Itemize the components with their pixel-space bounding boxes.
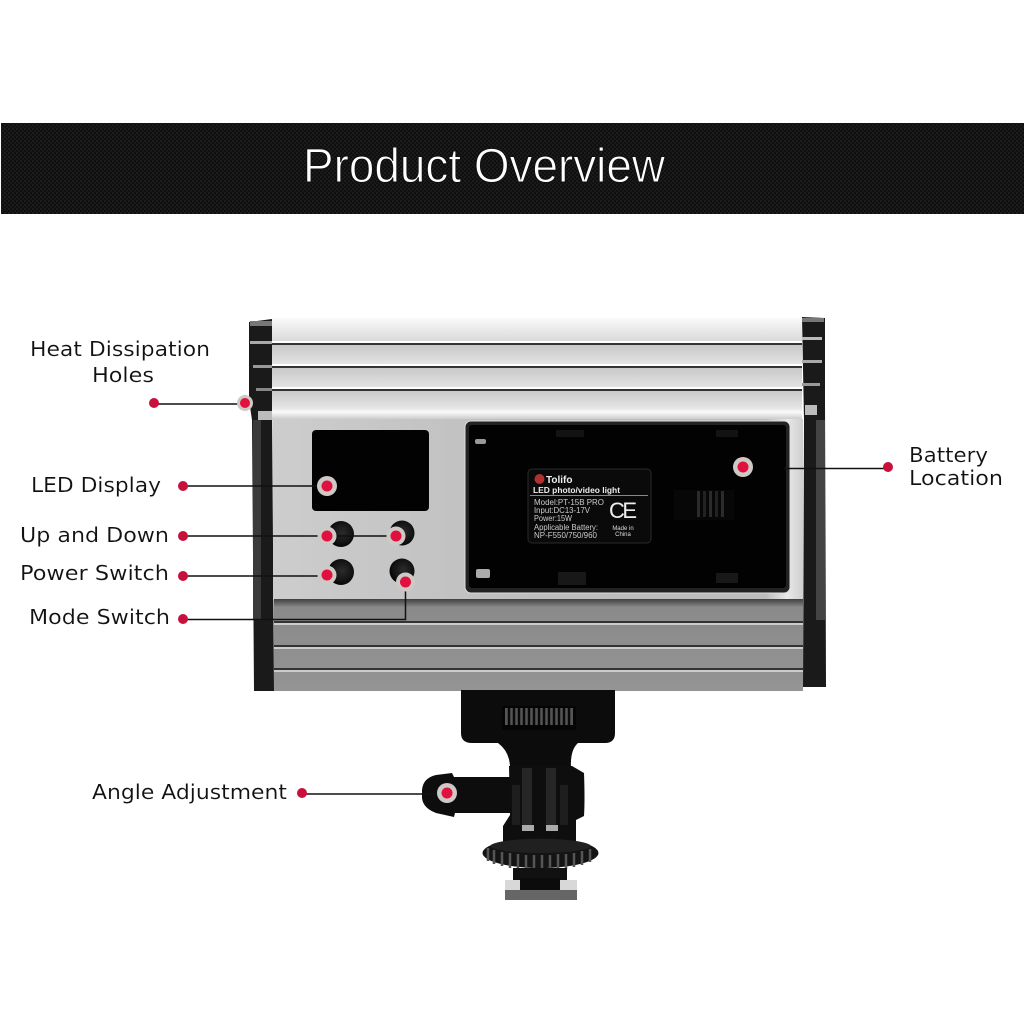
product label: Applicable Battery: — [534, 523, 598, 532]
product label — [528, 469, 651, 543]
callout: up and down — [20, 523, 406, 547]
callout: power switch — [20, 561, 336, 585]
product label: China — [615, 532, 631, 538]
callout: power switch: Power Switch — [20, 561, 169, 585]
battery label: Battery — [909, 443, 988, 467]
mount top block — [461, 690, 615, 768]
callout: LED display — [31, 473, 337, 497]
contact block — [674, 490, 734, 520]
callout: mode switch — [29, 572, 415, 629]
product label: Input:DC13-17V — [534, 506, 591, 515]
title banner — [1, 123, 1024, 214]
upper ribbed section — [272, 318, 802, 420]
hot shoe — [505, 878, 577, 900]
LED light body — [249, 317, 826, 691]
battery label: Location — [909, 466, 1003, 490]
pivot bracket — [503, 766, 584, 842]
battery compartment — [465, 421, 790, 593]
tilt knob — [502, 706, 576, 730]
callout: up and down: Up and Down — [20, 523, 169, 547]
middle control panel — [273, 419, 803, 600]
callout: battery location — [733, 443, 1003, 490]
heat label: Holes — [92, 363, 154, 387]
mount — [422, 690, 615, 900]
callout: LED display: LED Display — [31, 473, 161, 497]
callout: angle adjustment: Angle Adjustment — [92, 780, 287, 804]
callout: angle adjustment — [92, 780, 457, 804]
product label: NP-F550/750/960 — [534, 531, 598, 540]
angle lever arm — [422, 773, 510, 817]
product label: CE — [609, 498, 637, 523]
battery label — [909, 443, 1003, 490]
product label: Made in — [612, 526, 634, 532]
heat label — [30, 337, 210, 387]
callout: heat dissipation holes — [30, 337, 253, 411]
title: Product Overview — [303, 140, 665, 193]
heat label: Heat Dissipation — [30, 337, 210, 361]
product label: Model:PT-15B PRO — [534, 498, 604, 507]
lower ribbed section — [274, 599, 803, 691]
locking wheel — [482, 838, 598, 880]
LED display screen — [312, 430, 429, 511]
buttons — [328, 520, 414, 585]
right end cap — [802, 317, 826, 687]
product label: Tolifo — [546, 475, 572, 486]
product label: Power:15W — [534, 514, 572, 523]
callout: mode switch: Mode Switch — [29, 605, 170, 629]
product label: LED photo/video light — [533, 486, 620, 495]
left end cap — [249, 319, 274, 691]
